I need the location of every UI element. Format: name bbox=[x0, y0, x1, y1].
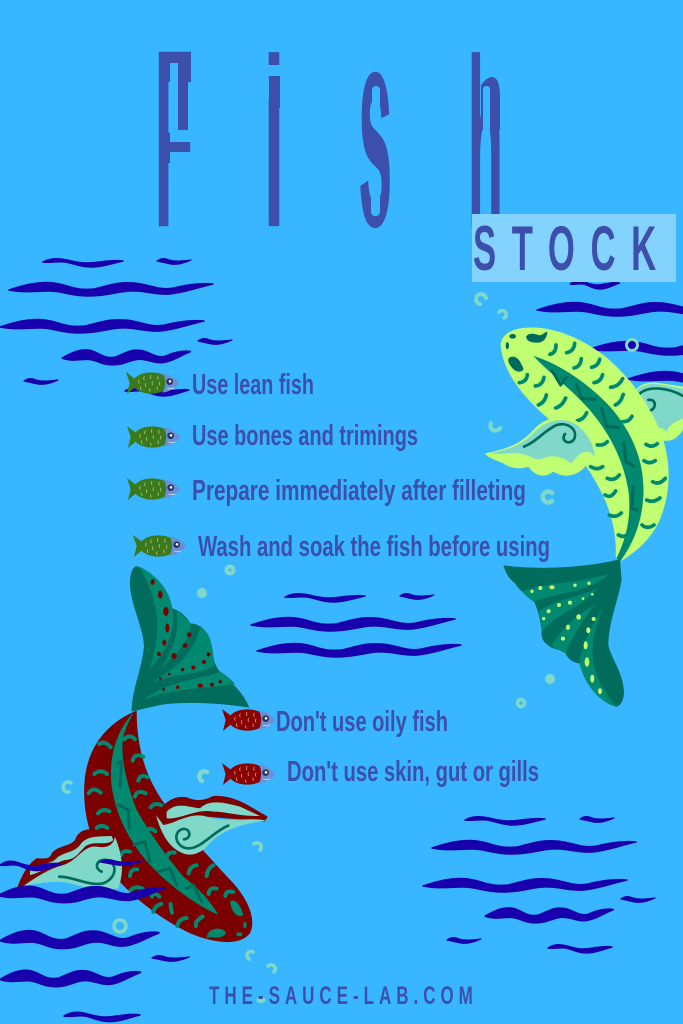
tail bbox=[503, 559, 624, 707]
don't list: oily fish: Don't use oily fish bbox=[276, 706, 448, 738]
spine details bbox=[117, 762, 202, 902]
don't list: skin, gut or gills bbox=[222, 756, 539, 788]
tail bbox=[130, 566, 249, 712]
waves: lower left, over red fish bbox=[0, 860, 189, 1022]
nose markings bbox=[508, 332, 547, 372]
title: Fish bbox=[155, 0, 503, 283]
do list: bones and trimmings bbox=[127, 420, 418, 452]
do list: bones and trimmings: Use bones and trimings bbox=[192, 420, 418, 452]
waves: lower right bbox=[423, 817, 655, 953]
do list: use lean fish bbox=[126, 369, 314, 401]
fish: large green, upper right bbox=[485, 328, 683, 707]
scale marks bbox=[519, 343, 665, 536]
spine bbox=[533, 356, 643, 562]
waves: upper left bbox=[0, 259, 232, 396]
spine bbox=[111, 713, 218, 915]
footer website: THE-SAUCE-LAB.COM bbox=[209, 982, 473, 1010]
spine details bbox=[552, 370, 637, 510]
do list: wash and soak bbox=[133, 531, 550, 563]
left fin bbox=[17, 829, 122, 890]
right fin bbox=[630, 383, 683, 441]
don't list: skin, gut or gills: Don't use skin, gut or gills bbox=[287, 756, 539, 788]
don't list: oily fish bbox=[222, 706, 448, 738]
title: Fish: F bbox=[155, 0, 193, 279]
fish: large red, lower left bbox=[17, 566, 268, 942]
left fin bbox=[485, 417, 597, 476]
do list: prepare immediately bbox=[127, 475, 526, 507]
body bbox=[84, 711, 252, 942]
bubbles around green fish bbox=[476, 294, 638, 706]
do list: prepare immediately: Prepare immediately after filleting bbox=[192, 475, 526, 507]
do list: use lean fish: Use lean fish bbox=[192, 369, 314, 401]
waves: upper right bbox=[537, 281, 683, 385]
subtitle: STOCK box: STOCK bbox=[473, 213, 656, 284]
tail markings bbox=[207, 901, 243, 938]
bubbles around red fish bbox=[63, 566, 275, 1003]
waves: middle bbox=[251, 594, 461, 657]
scale marks bbox=[89, 736, 233, 926]
title: Fish: h bbox=[468, 10, 503, 276]
right fin bbox=[156, 796, 268, 855]
body bbox=[501, 328, 669, 562]
title: Fish: i bbox=[264, 11, 284, 276]
